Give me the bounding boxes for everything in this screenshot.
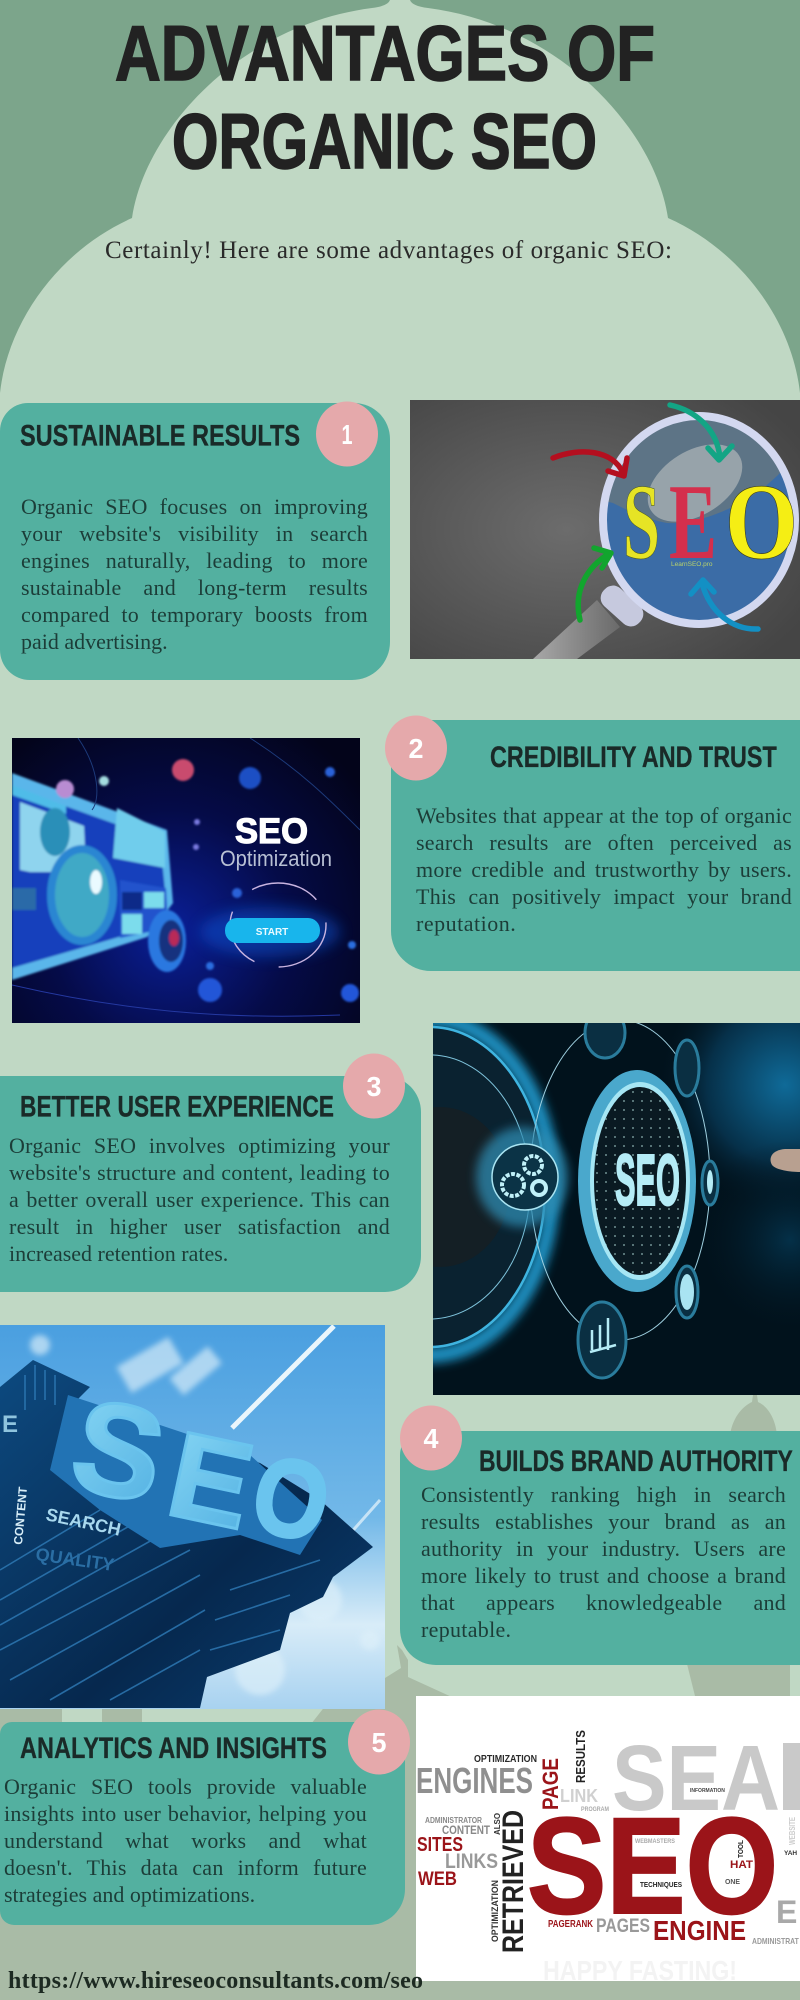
title: ADVANTAGES OF [115,9,655,97]
number badge 2 [385,716,447,780]
number badge 1: 1 [342,419,352,450]
body text 2: This can positively impact your brand [416,884,792,909]
image: 3D SEO city [0,1325,385,1709]
image: magnifying glass SEO: LearnSEO.pro [671,561,713,568]
image: SEO word cloud: E [776,1894,797,1930]
image: SEO optimization dashboard: START [256,927,288,938]
number badge 1 [316,402,378,466]
image: SEO word cloud: TOOL [738,1839,745,1858]
image: SEO word cloud: WEBSITE [788,1816,797,1845]
body text 5: doesn't. This data can inform future [4,1855,367,1880]
image: magnifying glass SEO [410,400,800,659]
image: 3D SEO city: QUALITY [34,1544,115,1575]
image: SEO word cloud: ENGINE [653,1915,746,1946]
image: magnifying glass SEO: O [725,462,798,581]
panel 1: sustainable results [0,403,390,680]
image: SEO word cloud: YAH [784,1850,797,1857]
footer url: https://www.hireseoconsultants.com/seo [8,1968,423,1994]
heading 1: SUSTAINABLE RESULTS [20,420,300,452]
image: 3D SEO city: S [60,1370,177,1532]
image: SEO word cloud: HAT [730,1859,753,1871]
image: SEO word cloud: RESULTS [573,1730,588,1783]
image: SEO word cloud: LINKS [445,1850,498,1873]
body text 3: a better overall user experience. This can [9,1187,390,1212]
body text 4: that appears knowledgeable and [421,1590,786,1615]
image: SEO word cloud: OPTIMIZATION [474,1754,537,1765]
number badge 2: 2 [408,733,424,764]
heading 2: CREDIBILITY AND TRUST [490,740,777,774]
panel 4: builds brand authority [400,1431,800,1665]
body text 2: Websites that appear at the top of organic [416,803,792,828]
panel 2: credibility and trust [391,720,800,971]
image: SEO word cloud: WEBMASTERS [635,1839,675,1845]
image: 3D SEO city: CONTENT [11,1486,30,1545]
panel 5: analytics and insights [0,1722,405,1925]
number badge 5: 5 [372,1727,386,1758]
body text 5: insights into user behavior, helping you [4,1801,367,1826]
number badge 3 [343,1054,405,1118]
number badge 4 [400,1406,462,1470]
body text 3: result in higher user satisfaction and [9,1214,390,1239]
body text 1 [21,494,368,654]
subtitle: Certainly! Here are some advantages of organic SEO: [105,237,672,264]
image: SEO word cloud: PAGES [596,1916,650,1937]
body text 4: results establishes your brand as an [421,1509,786,1534]
heading 4: BUILDS BRAND AUTHORITY [479,1444,793,1478]
image: SEO word cloud [416,1696,800,1981]
number badge 5 [348,1710,410,1774]
image: SEO word cloud: SEA [612,1726,780,1830]
image: SEO hologram ring [433,1023,800,1395]
body text 1: compared to temporary boosts from [21,602,368,627]
image: SEO word cloud: ONE [725,1879,740,1886]
image: 3D SEO city: SEARCH [44,1504,123,1540]
image: SEO word cloud: RETRIEVED [497,1810,530,1953]
body text 4: more likely to trust and choose a brand [421,1563,786,1588]
body text 1: engines naturally, leading to more [21,548,368,573]
body text 4 [421,1482,786,1642]
body text 5: Organic SEO tools provide valuable [4,1774,367,1799]
body text 2 [416,803,792,936]
body text 4: reputable. [421,1617,511,1642]
image: 3D SEO city: E [2,1411,18,1438]
image: magnifying glass SEO: S [623,463,660,582]
body text 2: search results are often perceived as [416,830,792,855]
panel 3: better user experience [0,1076,421,1292]
image: SEO word cloud: ADMINISTRAT [752,1936,799,1946]
image: SEO word cloud: CONTENT [442,1823,491,1837]
image: SEO word cloud: ALSO [493,1813,502,1835]
body text 4: Consistently ranking high in search [421,1482,786,1507]
body text 3: Organic SEO involves optimizing your [9,1133,390,1158]
image: SEO word cloud: PROGRAM [581,1807,609,1813]
body text 1: paid advertising. [21,629,168,654]
title [115,9,655,185]
body text 1: Organic SEO focuses on improving [21,494,368,519]
body text 2: reputation. [416,911,516,936]
body text 1: sustainable and long-term results [21,575,368,600]
image: SEO hologram ring: SEO [615,1141,680,1221]
body text 2: more credible and trustworthy by users. [416,857,792,882]
body text 5: strategies and optimizations. [4,1882,255,1907]
body text 5 [4,1774,367,1907]
image: SEO word cloud: SEO [527,1790,778,1943]
image: SEO optimization dashboard [12,738,360,1023]
image: SEO word cloud: SITES [417,1834,463,1856]
title: ORGANIC SEO [172,97,597,185]
image: SEO word cloud: PAGE [538,1758,563,1810]
image: 3D SEO city: E [158,1405,264,1555]
image: SEO word cloud: ADMINISTRATOR [425,1816,482,1825]
heading 3: BETTER USER EXPERIENCE [20,1090,334,1124]
body text 5: understand what works and what [4,1828,367,1853]
image: SEO word cloud: OPTIMIZATION [490,1880,500,1942]
image: SEO word cloud: ENGINES [416,1760,533,1801]
image: magnifying glass SEO: E [669,463,717,582]
body text 3: increased retention rates. [9,1241,228,1266]
image: SEO word cloud: PAGERANK [548,1919,594,1930]
image: 3D SEO city: O [242,1431,340,1567]
heading 5: ANALYTICS AND INSIGHTS [20,1732,327,1765]
number badge 3: 3 [366,1071,382,1102]
number badge 4: 4 [424,1423,439,1454]
image: SEO word cloud: TECHNIQUES [640,1882,682,1889]
image: SEO optimization dashboard: Optimization [220,846,332,871]
image: SEO optimization dashboard: SEO [235,812,308,851]
body text 3: website's structure and content, leading to [9,1160,390,1185]
body text 3 [9,1133,390,1266]
image: SEO word cloud: WEB [418,1869,457,1890]
image: SEO word cloud: LINK [560,1786,598,1806]
body text 1: your website's visibility in search [21,521,368,546]
image: SEO word cloud: INFORMATION [690,1788,725,1794]
body text 4: authority in your industry. Users are [421,1536,786,1561]
